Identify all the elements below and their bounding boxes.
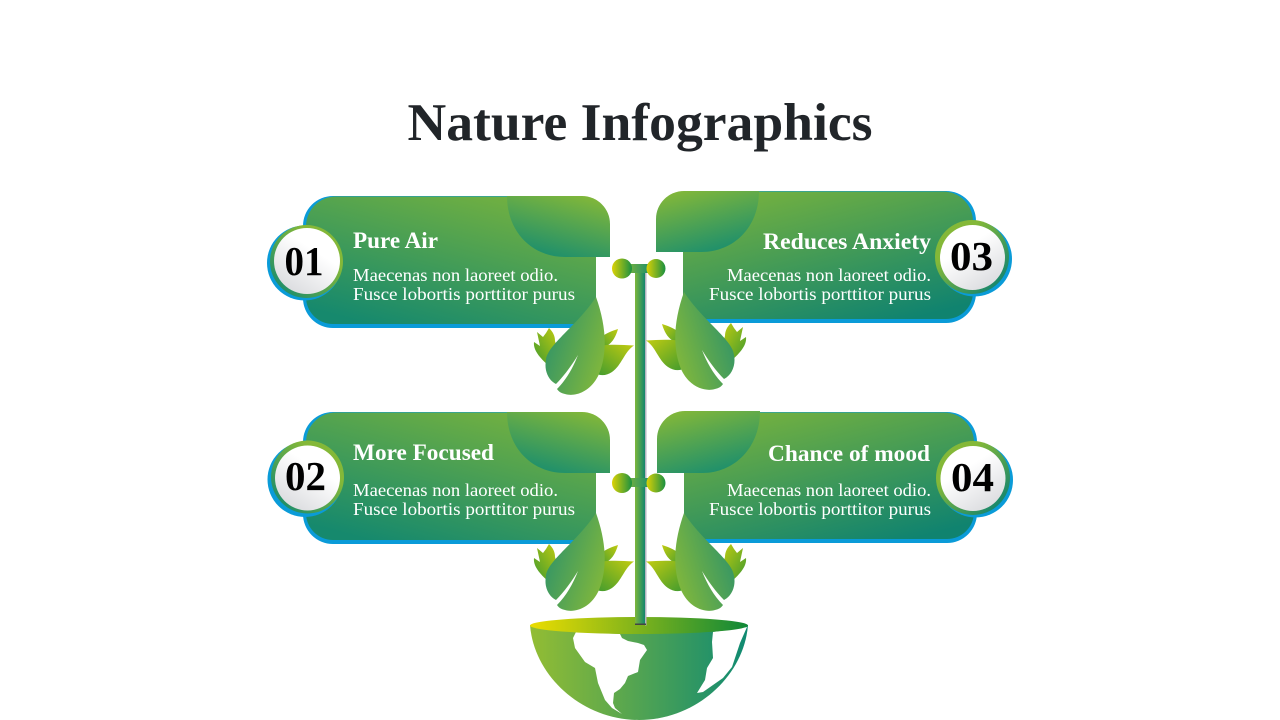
lower branch nodes <box>612 473 666 493</box>
corner tab 03 <box>656 191 759 252</box>
heading 04: Chance of mood <box>768 441 930 466</box>
panel: reduces anxiety <box>656 191 1012 323</box>
description 04 <box>709 480 931 519</box>
icon: leaves upper right <box>646 292 746 390</box>
number badge 01: 01 <box>284 238 324 284</box>
description 02 <box>353 480 575 519</box>
panel: more focused <box>268 412 610 544</box>
card body 02 <box>303 412 596 544</box>
number badge 02 <box>268 440 344 517</box>
panel: pure air <box>267 196 610 328</box>
number badge 01 <box>267 225 343 300</box>
description 04: Maecenas non laoreet odio. <box>727 480 931 500</box>
description 02: Fusce lobortis porttitor purus <box>353 499 575 519</box>
number badge 04 <box>936 441 1013 518</box>
icon: leaves upper left <box>534 297 634 395</box>
stem <box>635 264 646 625</box>
corner tab 02 <box>507 412 610 473</box>
south america <box>573 632 647 714</box>
description 01: Maecenas non laoreet odio. <box>353 265 558 285</box>
icon: half globe <box>530 616 748 720</box>
globe rim <box>530 617 748 634</box>
card body 01 <box>303 196 596 328</box>
description 03 <box>709 265 931 304</box>
upper branch nodes <box>612 258 666 278</box>
heading 03: Reduces Anxiety <box>763 229 932 254</box>
number badge 03 <box>935 220 1012 296</box>
stem base <box>635 616 646 626</box>
africa <box>697 627 747 693</box>
number badge 03: 03 <box>950 233 993 279</box>
card body 03 <box>683 191 976 323</box>
heading 02: More Focused <box>353 440 494 465</box>
description 01 <box>353 265 575 304</box>
title: Nature Infographics <box>408 94 872 152</box>
description 02: Maecenas non laoreet odio. <box>353 480 558 500</box>
description 01: Fusce lobortis porttitor purus <box>353 284 575 304</box>
corner tab 04 <box>657 411 760 473</box>
number badge 04: 04 <box>951 454 994 500</box>
description 04: Fusce lobortis porttitor purus <box>709 499 931 519</box>
number badge 02: 02 <box>285 453 326 499</box>
description 03: Fusce lobortis porttitor purus <box>709 284 931 304</box>
icon: leaves lower left <box>534 513 634 611</box>
heading 01: Pure Air <box>353 228 438 253</box>
panel: chance of mood <box>657 411 1013 543</box>
icon: leaves lower right <box>646 513 746 611</box>
card body 04 <box>684 412 977 543</box>
corner tab 01 <box>507 196 610 257</box>
description 03: Maecenas non laoreet odio. <box>727 265 931 285</box>
